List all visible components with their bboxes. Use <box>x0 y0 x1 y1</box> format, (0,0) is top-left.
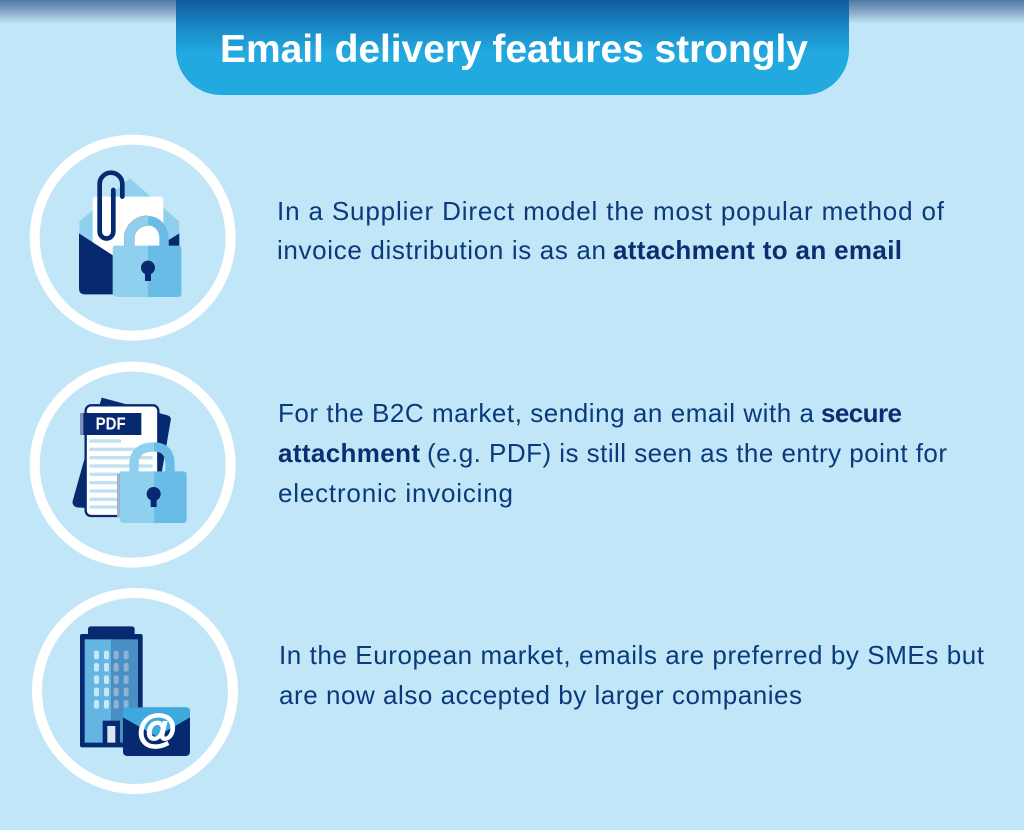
text block <box>277 196 945 265</box>
text block: In the European market, emails are preferred by SMEs but <box>279 640 985 670</box>
text block <box>278 398 947 508</box>
icon: envelope with paperclip and padlock <box>35 140 231 336</box>
text block: attachment to an email <box>613 235 902 265</box>
icon: PDF document with padlock: PDF <box>96 414 126 434</box>
text block: secure <box>821 398 902 428</box>
text block: For the B2C market, sending an email with a <box>278 398 815 428</box>
icon: office building with email envelope: @ <box>137 708 176 752</box>
text block: are now also accepted by larger companies <box>279 680 802 710</box>
icon: office building with email envelope <box>37 593 233 789</box>
panel: supplier direct row <box>35 140 945 336</box>
icon: PDF document with padlock <box>35 367 231 563</box>
title banner <box>176 0 849 95</box>
panel: European market row <box>37 593 985 789</box>
panel: B2C market row <box>35 367 947 563</box>
title: Email delivery features strongly <box>220 28 808 71</box>
text block: invoice distribution is as an <box>277 235 606 265</box>
text block: (e.g. PDF) is still seen as the entry point for <box>427 438 947 468</box>
text block: electronic invoicing <box>278 478 513 508</box>
text block: attachment <box>278 438 420 468</box>
text block: In a Supplier Direct model the most popular method of <box>277 196 945 226</box>
text block <box>279 640 985 710</box>
